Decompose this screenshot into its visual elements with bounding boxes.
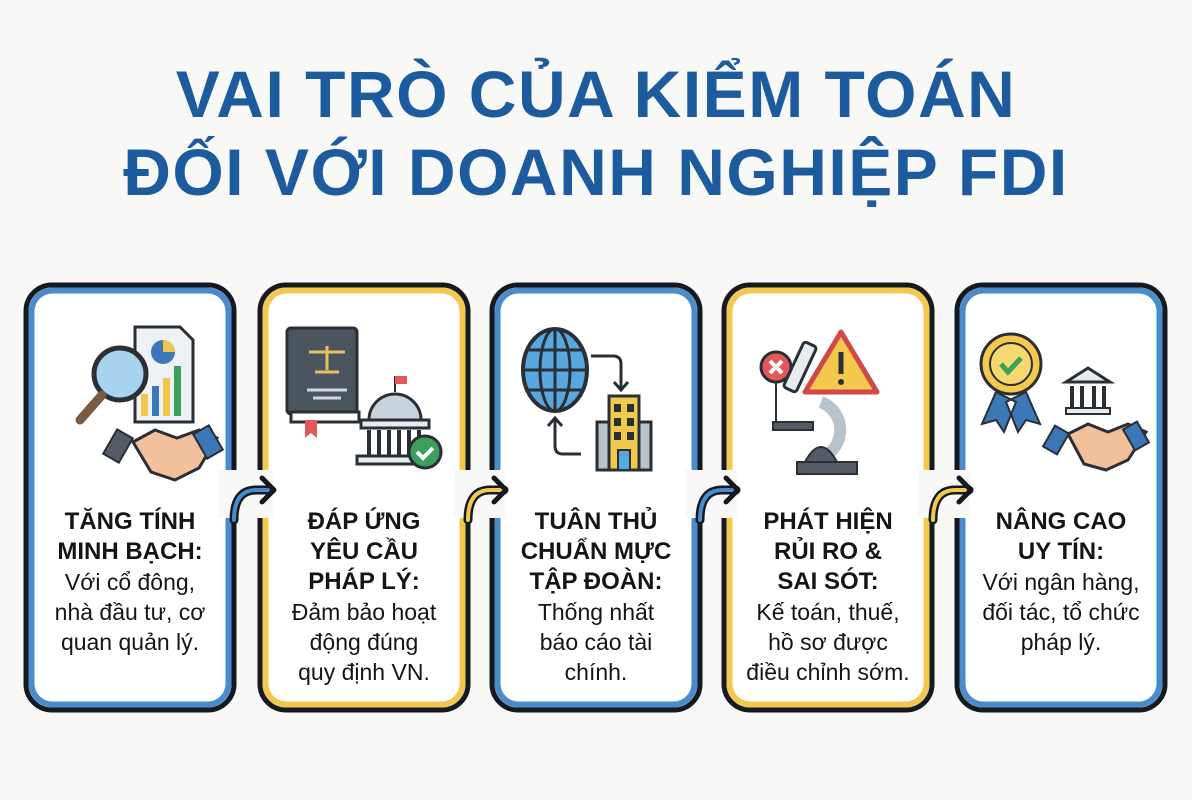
text block: Với cổ đông, (65, 569, 195, 595)
text block: chính. (565, 659, 627, 685)
text block: YÊU CẦU (310, 538, 418, 565)
icon: law book and government building (287, 328, 441, 468)
text block: hồ sơ được (768, 629, 888, 655)
panel: card 4 risk detection (722, 282, 934, 712)
text block: ĐÁP ỨNG (308, 508, 420, 535)
text block: PHÁP LÝ: (308, 568, 420, 595)
text block: UY TÍN: (1018, 538, 1104, 565)
arrow: card4 to card5 (933, 478, 971, 520)
arrow: card2 to card3 (468, 478, 506, 520)
arrow: card3 to card4 (700, 478, 738, 520)
text block: pháp lý. (1021, 629, 1101, 655)
text block: Với ngân hàng, (982, 569, 1140, 595)
text block (746, 507, 910, 685)
title (123, 57, 1069, 209)
text block: CHUẨN MỰC (521, 538, 671, 565)
text block: PHÁT HIỆN (763, 508, 893, 535)
text block: động đúng (310, 629, 418, 655)
text block (55, 508, 205, 655)
text block (521, 507, 671, 685)
icon: badge, bank and handshake (981, 334, 1149, 470)
text block (292, 507, 436, 685)
text block: TẬP ĐOÀN: (530, 568, 662, 595)
text block: TUÂN THỦ (535, 508, 657, 535)
title: ĐỐI VỚI DOANH NGHIỆP FDI (123, 135, 1069, 209)
title: VAI TRÒ CỦA KIỂM TOÁN (176, 57, 1016, 131)
arrow: card1 to card2 (234, 478, 274, 520)
text block: Thống nhất (538, 599, 654, 625)
text block: Đảm bảo hoạt (292, 599, 436, 625)
icon: microscope, error and warning (761, 332, 877, 474)
text block: SAI SÓT: (777, 568, 879, 595)
text block: TĂNG TÍNH (65, 508, 195, 535)
text block: điều chỉnh sớm. (746, 659, 910, 685)
icon: report with magnifier and handshake (80, 327, 223, 480)
panel: card 5 reputation (954, 282, 1168, 712)
text block: RỦI RO & (774, 538, 882, 565)
panel: card 2 legal (258, 282, 470, 712)
text block: NÂNG CAO (996, 508, 1126, 535)
text block: báo cáo tài (540, 629, 652, 655)
text block: Kế toán, thuế, (756, 599, 900, 625)
text block: nhà đầu tư, cơ (55, 599, 205, 625)
icon: globe and building with arrows (523, 329, 651, 470)
panel: card 1 transparency (24, 282, 236, 712)
text block: quy định VN. (298, 659, 430, 685)
text block: đối tác, tổ chức (982, 599, 1140, 625)
text block: quan quản lý. (61, 629, 199, 655)
text block (982, 507, 1140, 655)
panel: card 3 group standards (490, 282, 702, 712)
text block: MINH BẠCH: (57, 538, 203, 565)
